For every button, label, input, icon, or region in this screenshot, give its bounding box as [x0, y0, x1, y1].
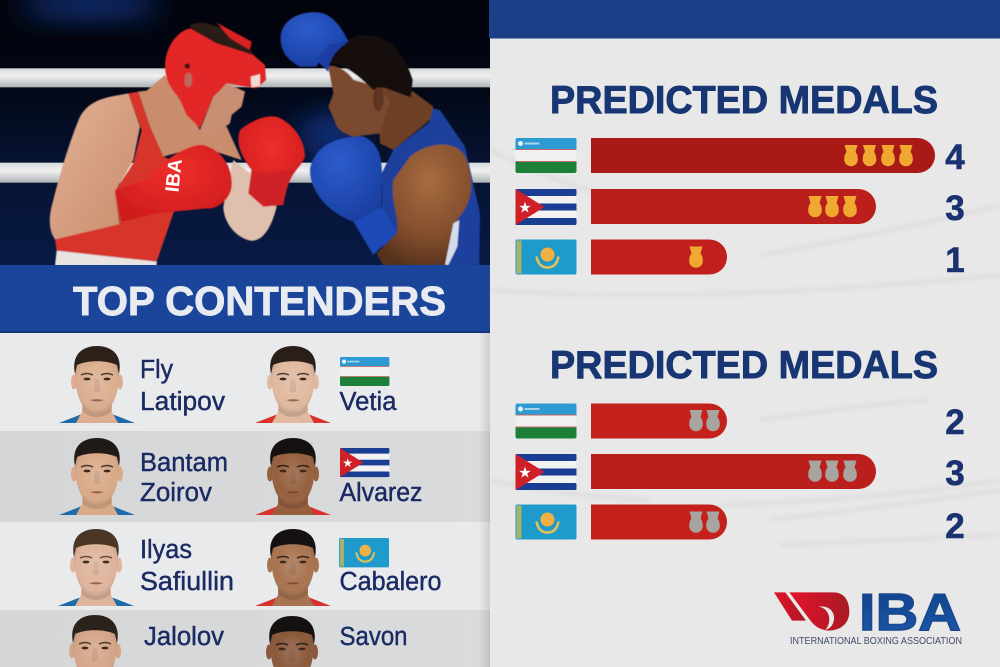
contender: Cabalero with Kazakhstan flag: Cabalero — [340, 568, 442, 596]
contender: Ilyas Safiullin: Ilyas — [140, 536, 192, 564]
row: Kazakhstan 1: 1 — [945, 241, 965, 280]
red boxer — [50, 23, 305, 266]
row: Cuba 3 — [516, 189, 965, 228]
row: Uzbekistan 4 — [516, 138, 965, 177]
contender: Bantam Zoirov: Zoirov — [140, 479, 212, 507]
contender: Alvarez with Cuba flag: Alvarez — [340, 479, 422, 507]
row: Kazakhstan 2 — [516, 504, 965, 546]
contender: Fly Latipov: Latipov — [140, 388, 225, 416]
contender: Vetia with Uzbekistan flag: Vetia — [340, 388, 397, 416]
contender: Fly Latipov: Fly — [140, 356, 173, 384]
heading: top contenders: TOP CONTENDERS — [73, 278, 446, 324]
contender: Savon: Savon — [340, 623, 408, 651]
contender: Jalolov: Jalolov — [144, 623, 224, 651]
glove brand mark: IBA — [162, 158, 187, 193]
wordmark: IBA — [859, 584, 961, 642]
heading: predicted medals gold: PREDICTED MEDALS — [550, 79, 938, 122]
contender: Ilyas Safiullin: Safiullin — [140, 568, 234, 596]
contender: Savon — [254, 616, 408, 667]
photo: two boxers in the ring — [0, 0, 490, 266]
row: Kazakhstan 2: 2 — [945, 507, 965, 546]
row: Uzbekistan 2: 2 — [945, 403, 965, 442]
row: Cuba 3: 3 — [945, 189, 965, 228]
contender: Vetia with Uzbekistan flag — [255, 346, 397, 423]
top right blue band — [489, 0, 1000, 38]
contender: Alvarez with Cuba flag — [255, 438, 422, 515]
icon: IBA glove mark — [774, 592, 849, 631]
logo: International Boxing Association — [774, 584, 962, 647]
contender: Cabalero with Kazakhstan flag — [255, 529, 442, 606]
bar chart: gold medals — [516, 138, 965, 280]
contender: Ilyas Safiullin — [58, 529, 234, 606]
bar chart: silver medals — [516, 403, 965, 546]
contender: Fly Latipov — [59, 346, 225, 423]
contender: Jalolov — [57, 615, 224, 667]
row: Uzbekistan 2 — [516, 403, 965, 442]
tagline: INTERNATIONAL BOXING ASSOCIATION — [790, 636, 962, 647]
heading: predicted medals silver: PREDICTED MEDALS — [550, 344, 938, 387]
contender: Bantam Zoirov: Bantam — [140, 449, 228, 477]
row: Cuba 3 — [516, 454, 965, 493]
contender: Bantam Zoirov — [59, 438, 228, 515]
heading band: top contenders — [0, 265, 490, 333]
row: Cuba 3: 3 — [945, 454, 965, 493]
panel: contenders table rows — [0, 333, 490, 667]
blue boxer — [281, 12, 480, 266]
row: Kazakhstan 1 — [516, 240, 965, 280]
row: Uzbekistan 4: 4 — [945, 138, 965, 177]
